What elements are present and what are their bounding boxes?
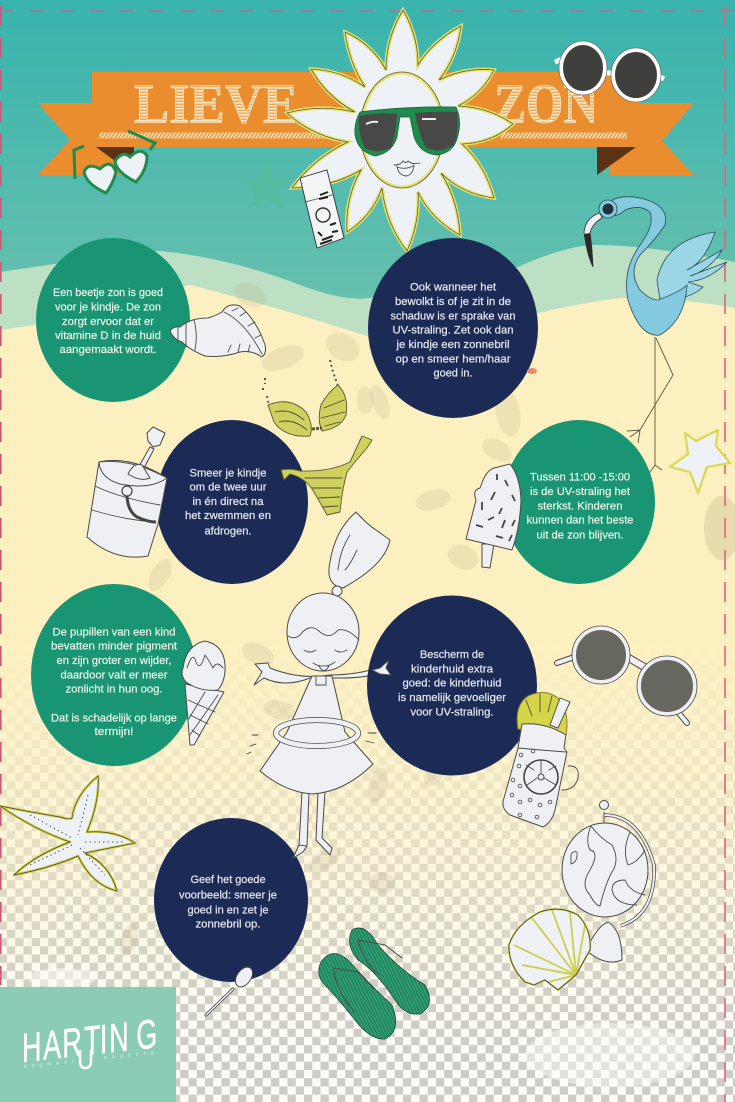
circle: De pupillen: Dat is schadelijk op lange <box>51 712 177 724</box>
circle: Ook wanneer het bewolkt: schaduw is er sprake van <box>390 310 516 322</box>
wings <box>657 232 727 300</box>
lemon <box>517 692 567 735</box>
circle: Ook wanneer het bewolkt <box>368 238 538 418</box>
hoop <box>276 720 358 746</box>
icon: popsicle <box>466 464 521 568</box>
icon: bucket with shovel <box>87 427 167 557</box>
circle: Bescherm de kinderhuid: is namelijk gevoeliger <box>398 692 506 704</box>
icon: lemonade jar <box>503 692 578 827</box>
logo tagline: oogmeet <box>24 1059 75 1070</box>
jar body <box>503 724 567 827</box>
icon: spoon <box>206 964 256 1015</box>
circle: Een beetje zon <box>36 238 190 402</box>
circle: Tussen 11:00 -15:00 <box>503 420 655 584</box>
footprints <box>28 278 735 1087</box>
circle: De pupillen: zonlicht in hun oog. <box>66 684 162 696</box>
faint star in sea <box>241 160 290 210</box>
icon: round white sunglasses <box>555 41 664 102</box>
circle: Ook wanneer het bewolkt: op en smeer hem/haar <box>396 353 511 365</box>
skirt and dress <box>260 676 373 794</box>
circle: Smeer je kindje: om de twee uur <box>190 482 267 494</box>
shovel <box>138 427 165 470</box>
icon: ice cream cone <box>182 641 225 745</box>
bucket <box>87 460 167 557</box>
circle: Een beetje zon: Een beetje zon is goed <box>53 287 163 299</box>
circle: Bescherm de kinderhuid <box>367 596 537 776</box>
small lips mark <box>527 368 537 374</box>
icon: conch shell <box>170 305 266 357</box>
icon: globe <box>562 800 654 962</box>
head <box>599 200 617 218</box>
logo U-shaped stem <box>80 1050 91 1068</box>
circle: Geef het goede voorbeeld: voorbeeld: smeer je <box>179 890 277 902</box>
ribbon main band <box>92 72 640 147</box>
title banner <box>38 72 694 175</box>
circle: Bescherm de kinderhuid: kinderhuid extra <box>411 663 494 675</box>
legs <box>627 337 673 475</box>
beak <box>584 213 602 267</box>
icon: yellow starfish <box>670 430 730 493</box>
icon: bikini top <box>263 360 347 436</box>
circle: Smeer je kindje: in én direct na <box>192 496 264 508</box>
circle: Tussen 11:00 -15:00: is de UV-straling het <box>530 486 631 498</box>
circle: De pupillen: en zijn groter en wijder, <box>56 655 172 667</box>
illustration: girl with hoop <box>247 512 390 858</box>
circle: Ook wanneer het bewolkt: bewolkt is of je zit in de <box>395 296 511 308</box>
girl's feet over circle <box>293 845 307 858</box>
circle: Tussen 11:00 -15:00: Tussen 11:00 -15:00 <box>530 472 630 484</box>
logo wordmark: HARTING <box>22 1011 157 1072</box>
circle: De pupillen <box>31 584 197 766</box>
title: ZON: ZON <box>494 74 598 136</box>
logo tagline right: oogzorg <box>104 1050 154 1061</box>
arms <box>254 660 390 685</box>
girl's right hand over circle <box>372 660 391 675</box>
sunglasses frame <box>355 107 460 156</box>
background: foam wave <box>0 245 735 339</box>
circle: Een beetje zon: aangemaakt wordt. <box>60 344 156 356</box>
ponytail <box>329 512 390 588</box>
circle: Ook wanneer het bewolkt: goed in. <box>434 368 472 380</box>
sun with sunglasses <box>287 10 513 251</box>
circle: De pupillen: De pupillen van een kind <box>52 627 176 639</box>
circle: Smeer je kindje: afdrogen. <box>204 526 252 538</box>
circle: Geef het goede voorbeeld: goed in en zet je <box>188 904 268 916</box>
circle: Bescherm de kinderhuid: Bescherm de <box>420 649 484 661</box>
circle: Geef het goede voorbeeld: zonnebril op. <box>196 918 260 930</box>
icon: grey round sunglasses <box>557 626 697 723</box>
circle: Smeer je kindje: Smeer je kindje <box>190 467 266 479</box>
circle: Ook wanneer het bewolkt: je kindje een zonnebril <box>395 339 510 351</box>
circle: Geef het goede voorbeeld: Geef het goede <box>190 874 266 886</box>
straw <box>550 698 570 728</box>
circle: Geef het goede voorbeeld <box>154 818 308 982</box>
icon: flamingo <box>584 197 727 475</box>
icon: flip flops <box>319 928 429 1039</box>
legs <box>293 792 309 858</box>
lenses <box>359 113 397 151</box>
circle: Tussen 11:00 -15:00: uit de zon blijven. <box>536 529 624 541</box>
head <box>287 593 359 671</box>
ribbon folds <box>96 147 134 175</box>
circle: Ook wanneer het bewolkt: Ook wanneer het <box>410 282 497 294</box>
hatch lines <box>99 132 339 138</box>
icon: scallop shell <box>509 909 590 990</box>
circle: Bescherm de kinderhuid: goed: de kinderhuid <box>402 678 502 690</box>
icon: bikini bottom <box>281 436 372 515</box>
circle: De pupillen: daardoor valt er meer <box>60 669 168 681</box>
sun face <box>361 73 443 187</box>
logo panel: Harting <box>0 987 176 1102</box>
circle: Een beetje zon: zorgt ervoor dat er <box>62 316 154 328</box>
ribbon tails <box>38 103 120 175</box>
icon: heart sunglasses <box>74 131 155 193</box>
circle: Een beetje zon: voor je kindje. De zon <box>55 302 161 314</box>
circle: De pupillen: termijn! <box>94 726 134 738</box>
lips <box>394 161 420 176</box>
body and neck <box>600 197 687 335</box>
circle: Smeer je kindje <box>156 420 308 584</box>
circle: Ook wanneer het bewolkt: UV-straling. Zet ook dan <box>392 325 514 337</box>
circle: Smeer je kindje: het zwemmen en <box>185 510 271 522</box>
circle: Tussen 11:00 -15:00: kunnen dan het beste <box>526 514 634 526</box>
circle: De pupillen: bevatten minder pigment <box>51 641 178 653</box>
title: LIEVE: LIEVE <box>134 74 298 136</box>
background: sea <box>0 0 735 299</box>
circle: Bescherm de kinderhuid: voor UV-straling. <box>410 706 494 718</box>
icon: starfish left <box>0 776 135 891</box>
icon: sunscreen bottle <box>300 170 344 248</box>
circle: Tussen 11:00 -15:00: sterkst. Kinderen <box>538 500 622 512</box>
circle: Een beetje zon: vitamine D in de huid <box>55 330 161 342</box>
